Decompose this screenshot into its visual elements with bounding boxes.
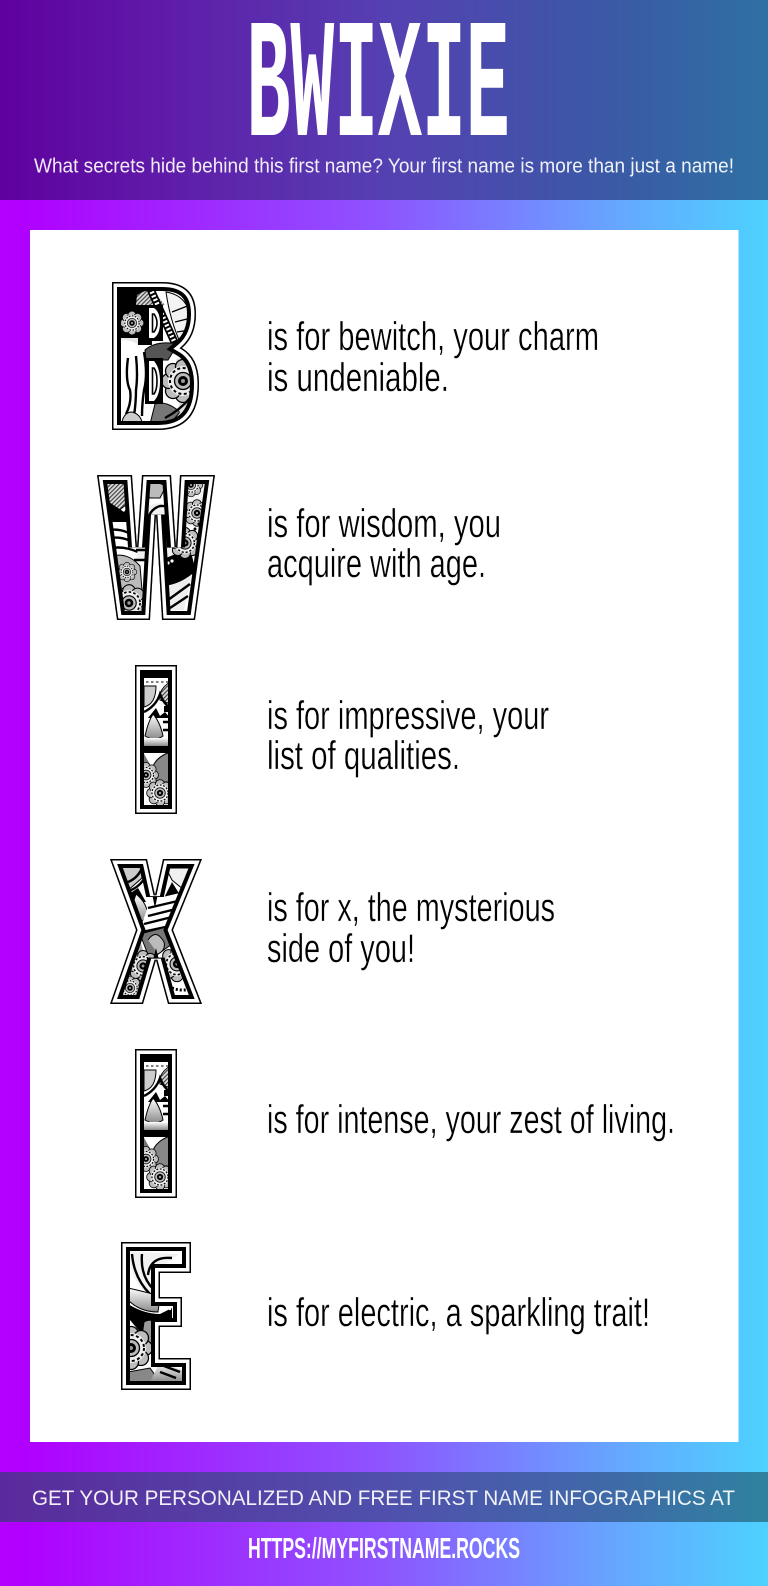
subtitle: What secrets hide behind this first name? Your first name is more than just a name! [34, 156, 734, 178]
text: X line: is for x, the mysterious [267, 886, 555, 930]
icon: ornamental letter I [134, 665, 177, 814]
icon: ornamental letter E [121, 1242, 191, 1390]
text: I line: is for impressive, your [267, 694, 549, 738]
text: W line [267, 502, 501, 586]
text: X line: side of you! [267, 927, 415, 971]
text: X line [267, 886, 555, 971]
icon: ornamental letter B [112, 282, 204, 432]
footer band [0, 1472, 768, 1522]
icon: ornamental letter I (second) [134, 1049, 177, 1198]
panel: white letter list [30, 230, 738, 1442]
header band [0, 0, 768, 200]
footer url: HTTPS://MYFIRSTNAME.ROCKS [248, 1533, 520, 1565]
text: B line [267, 315, 599, 400]
footer call to action: GET YOUR PERSONALIZED AND FREE FIRST NAME INFOGRAPHICS AT [32, 1485, 735, 1510]
text: B line: is undeniable. [267, 356, 449, 400]
title: BWIXIE [246, 0, 510, 187]
text: I line [267, 694, 549, 778]
text: W line: is for wisdom, you [267, 502, 501, 546]
icon: ornamental letter X [108, 859, 204, 1005]
text: W line: acquire with age. [267, 542, 486, 586]
icon: ornamental letter W [95, 473, 217, 621]
text: I line: list of qualities. [267, 734, 460, 778]
text: B line: is for bewitch, your charm [267, 315, 599, 359]
